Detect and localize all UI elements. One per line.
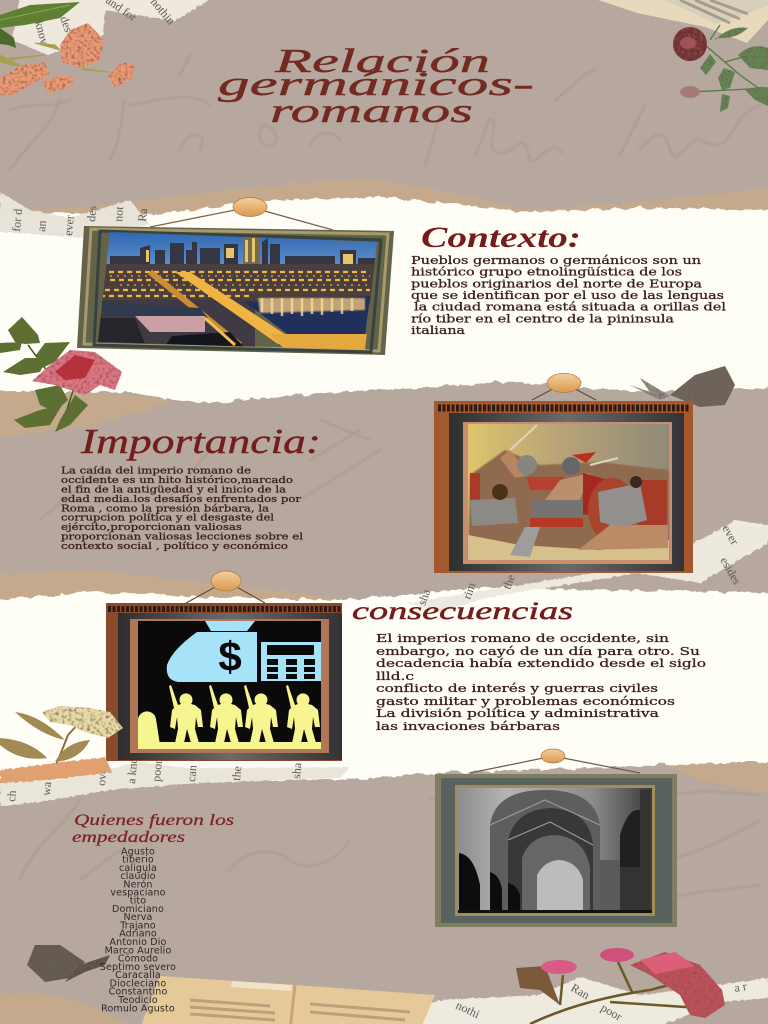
paper strip: left band: an — [34, 220, 49, 232]
icon: butterfly bottom left — [27, 945, 110, 982]
icon: open book bottom — [140, 976, 435, 1024]
picture 3: hanging frame with money bag and soldiers — [106, 571, 342, 761]
torn band 2: white paper — [0, 587, 768, 782]
paper strip: bottom left: sha — [289, 761, 304, 779]
list of emperors: Agusto — [121, 846, 155, 858]
title: romanos — [270, 93, 473, 130]
text block: consecuencias: llld.c — [376, 670, 414, 683]
list of emperors: Adriano — [119, 928, 157, 940]
paper strip: bottom right — [375, 977, 768, 1024]
list of emperors: Domiciano — [112, 904, 164, 915]
paper strip: bottom right: Ran — [568, 980, 592, 1002]
text block: importancia — [61, 466, 303, 552]
torn band 1: tan edge — [0, 178, 768, 260]
text block: consecuencias: El imperios romano de occidente, sin — [376, 632, 669, 645]
icon: green leaves top left — [0, 2, 80, 48]
list of emperors: Diocleciano — [110, 978, 166, 990]
paper strip: right ribbon: sha — [415, 587, 434, 607]
icon: open book top right — [598, 0, 768, 43]
paper strip: bottom left: a knot — [124, 753, 141, 784]
paper strip: right ribbon: esides — [717, 554, 744, 587]
paper strip: right ribbon: rim — [460, 580, 479, 601]
text block: importancia: contexto social , político y económico — [61, 541, 289, 552]
text block: importancia: Roma , como la presión bárbara, la — [61, 504, 270, 514]
torn tan corner bottom left — [0, 992, 150, 1024]
text block: contexto: Pueblos germanos o germánicos son un — [411, 254, 701, 267]
list of emperors: tiberio — [122, 854, 154, 866]
paper strip: bottom left: wa — [39, 780, 54, 796]
torn band 1: white paper — [0, 197, 768, 403]
list of emperors: Nerva — [123, 912, 153, 923]
list of emperors: Marco Aurelio — [105, 946, 171, 956]
list of emperors: claudio — [120, 871, 156, 882]
paper strip: bottom left: poor — [149, 759, 165, 782]
soldiers silhouettes — [138, 685, 321, 749]
list of emperors: Antonio Dio — [110, 937, 167, 948]
paper strip: bottom left: ch — [4, 790, 19, 802]
list of emperors: Constantino — [109, 986, 167, 998]
paper strip: bottom right: poor — [598, 1000, 625, 1024]
icon: dried flower and orange tape — [0, 706, 123, 783]
paper strip: left band: for d — [9, 208, 25, 232]
paper strip: bottom left: can — [184, 764, 199, 782]
title: Relación — [273, 43, 490, 80]
list of emperors: tito — [130, 896, 146, 906]
paper strip: top left: knov — [32, 19, 52, 46]
paper strip: bottom left — [0, 753, 350, 806]
icon: rose left with leaves — [0, 317, 122, 432]
paper strip: bottom right: a r — [733, 979, 748, 995]
list of emperors: Septimo severo — [100, 962, 176, 973]
paper strip: bottom left: over — [94, 764, 110, 786]
text block: importancia: occidente es un hito histórico,marcado — [61, 475, 294, 486]
torn tan corner right — [665, 762, 768, 795]
paper strip: top left: des — [57, 14, 76, 34]
icon: butterfly top right — [630, 366, 735, 407]
paper strip: left band: Ra — [135, 207, 150, 222]
text block: consecuencias: embargo, no cayó de un día para otro. Su — [376, 645, 700, 658]
text block: importancia: el fin de la antigüedad y el inicio de la — [61, 484, 287, 496]
subheading: Quienes fueron los empedadores: Quienes fueron los — [74, 812, 234, 829]
list of emperors: Teodicio — [117, 995, 158, 1006]
title — [218, 43, 534, 130]
paper strip: right ribbon — [407, 520, 768, 612]
list of emperors: Caracalla — [115, 970, 161, 981]
picture 2: hanging frame with battle painting — [434, 374, 693, 573]
text block: consecuencias: gasto militar y problemas económicos — [376, 695, 675, 708]
paper strip: left band: not — [111, 205, 126, 222]
list of emperors: Cómodo — [118, 954, 158, 964]
heading: consecuencias: consecuencias — [352, 598, 573, 625]
text block: consecuencias: decadencia había extendido desde el siglo — [376, 657, 706, 670]
paper strip: bottom left: the — [229, 765, 244, 781]
picture 4: hanging frame with cathedral — [435, 749, 677, 927]
text block: contexto — [411, 254, 727, 337]
icon: peach flower clusters — [0, 23, 135, 95]
text block: importancia: proporcionan valiosas lecciones sobre el — [61, 532, 303, 542]
torn band 2: tan edge — [0, 570, 360, 615]
list of emperors: Trajano — [119, 920, 156, 932]
text block: importancia: La caída del imperio romano de — [61, 466, 251, 476]
text block: contexto: italiana — [411, 324, 466, 337]
paper strip: left band: des — [84, 205, 99, 222]
text block: contexto: la ciudad romana está situada a orillas del — [414, 300, 727, 314]
text block: contexto: histórico grupo etnolingüística de los — [411, 266, 682, 278]
text block: contexto: que se identifican por el uso de las lenguas — [411, 289, 724, 302]
icon: pink flowers bottom right — [516, 948, 725, 1024]
text block: consecuencias: las invaciones bárbaras — [376, 720, 560, 733]
text block: importancia: corrupcion política y el desgaste del — [61, 512, 274, 524]
paper strip: right ribbon: the — [500, 572, 518, 591]
money bag with dollar — [167, 621, 257, 682]
list of emperors: Nerón — [123, 880, 153, 890]
text block: consecuencias — [376, 632, 706, 733]
paper strip: top left — [12, 0, 215, 55]
text block: contexto: río tiber en el centro de la pininsula — [411, 312, 675, 326]
text block: contexto: pueblos originarios del norte de Europa — [411, 278, 703, 290]
paper strip: left band — [0, 192, 150, 238]
heading: Importancia: Importancia: — [80, 422, 321, 461]
text block: consecuencias: La división política y administrativa — [376, 707, 659, 720]
money bag with dollar: $ — [218, 633, 242, 680]
title: germánicos- — [218, 66, 534, 103]
heading: Contexto: Contexto: — [421, 221, 581, 254]
text block: importancia: edad media.los desafíos enfrentados por — [61, 494, 302, 505]
subheading: Quienes fueron los empedadores — [72, 812, 234, 846]
list of emperors: Romulo Agusto — [101, 1004, 175, 1014]
torn tan corner left — [0, 392, 172, 438]
text block: consecuencias: conflicto de interés y guerras civiles — [376, 682, 658, 695]
paper strip: bottom right: nothi — [454, 998, 483, 1021]
list of emperors — [100, 846, 176, 1014]
list of emperors: vespaciano — [110, 888, 166, 898]
list of emperors: caligula — [119, 863, 157, 874]
subheading: Quienes fueron los empedadores: empedadores — [72, 829, 185, 846]
calculator — [261, 642, 321, 681]
icon: rose top right with leaves — [673, 25, 768, 112]
paper strip: left band: ever — [61, 214, 77, 236]
paper strip: right ribbon: ever — [719, 522, 742, 547]
text block: importancia: ejército,proporcionan valiosas — [61, 522, 242, 533]
picture 1: hanging frame with city at night — [77, 198, 394, 355]
